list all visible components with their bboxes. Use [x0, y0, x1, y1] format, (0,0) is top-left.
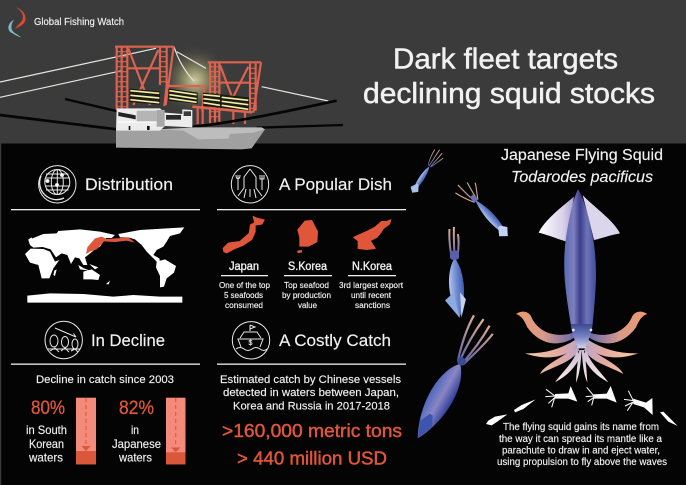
text block: flying squid explanation: parachute to draw in and eject water,	[502, 446, 660, 456]
icon: squid with cutlery	[231, 166, 269, 203]
stat: 82% in Japanese waters: Japanese	[112, 437, 161, 451]
text block: N.Korea: until recent	[351, 291, 392, 300]
text block: S.Korea: by production	[282, 291, 331, 300]
header band	[0, 0, 686, 144]
stat: 82% in Japanese waters: waters	[118, 450, 152, 464]
stat: 80% in South Korean waters: 80%	[31, 398, 65, 419]
icon: ship with dollar: $	[249, 340, 253, 347]
illustration: squid fishing vessel	[0, 44, 343, 149]
text block: N.Korea	[339, 261, 404, 310]
text block: flying squid explanation: the way it can spread its mantle like a	[499, 434, 662, 445]
text block: flying squid explanation: The flying squid gains its name from	[503, 422, 659, 433]
stat: 80% in South Korean waters: in South	[26, 423, 67, 437]
icon: declining squid	[45, 321, 82, 359]
text: decline since 2003: Decline in catch since 2003	[36, 374, 174, 386]
text block: Japan	[219, 261, 271, 310]
heading: Japanese Flying Squid: Japanese Flying Squid	[501, 147, 663, 164]
stat: 82% in Japanese waters	[112, 398, 161, 464]
map: South Korea	[298, 221, 317, 252]
small squid 3	[441, 227, 467, 318]
squid lights	[130, 89, 249, 111]
hull and cabin	[116, 108, 265, 149]
illustration: flying squid sequence	[486, 386, 678, 426]
poles over frames	[0, 99, 343, 129]
stat: million USD: > 440 million USD	[237, 448, 387, 468]
stat: 82% in Japanese waters: 82%	[119, 398, 154, 419]
vessel frames	[115, 47, 261, 124]
text block: Japan: 5 seafoods	[224, 291, 263, 300]
text block: Japan: One of the top	[219, 281, 271, 290]
text block: Japan: consumed	[225, 301, 263, 310]
text block: N.Korea: N.Korea	[352, 261, 393, 273]
heading: Japanese Flying Squid: Todarodes pacificus	[511, 169, 653, 186]
stat: 82% in Japanese waters: in	[131, 423, 139, 437]
small squid 2	[453, 175, 516, 243]
text block: estimated catch: detected in waters between Japan,	[223, 387, 399, 399]
text block: N.Korea: 3rd largest export	[339, 281, 404, 290]
title: declining squid stocks	[363, 78, 655, 110]
map: North Korea	[354, 220, 391, 249]
text block: S.Korea: value	[298, 301, 318, 310]
stat: metric tons: >160,000 metric tons	[222, 421, 402, 441]
stat: 80% in South Korean waters: waters	[28, 450, 63, 464]
text block: S.Korea: S.Korea	[288, 261, 328, 273]
text block: Japan: Japan	[229, 261, 259, 273]
heading: Distribution: Distribution	[85, 175, 173, 194]
small squid 4	[407, 314, 497, 445]
logo: Global Fishing Watch	[8, 8, 124, 38]
heading: Japanese Flying Squid	[501, 147, 663, 186]
text block: N.Korea: sanctions	[355, 301, 390, 310]
fins and mantle	[539, 189, 620, 324]
icon: ship with dollar	[232, 322, 270, 359]
text block: flying squid explanation: using propulsion to fly above the waves	[497, 457, 667, 468]
bar: 80% decline	[76, 398, 96, 464]
map: Japan	[223, 217, 264, 253]
wires and poles	[0, 47, 328, 101]
stat: 80% in South Korean waters	[26, 398, 67, 464]
text block: estimated catch: Estimated catch by Chinese vessels	[220, 374, 402, 386]
world map with squid range	[25, 227, 184, 303]
panel: country maps	[223, 217, 391, 253]
title	[363, 44, 655, 110]
text block: estimated catch	[220, 374, 402, 413]
text block: flying squid explanation	[497, 422, 667, 468]
logo: Global Fishing Watch: Global Fishing Watch	[34, 17, 124, 28]
title: Dark fleet targets	[393, 44, 618, 76]
heading: A Costly Catch: A Costly Catch	[279, 331, 391, 350]
heading: A Popular Dish: A Popular Dish	[279, 175, 392, 194]
text block: S.Korea: Top seafood	[284, 281, 329, 290]
heading: In Decline: In Decline	[91, 331, 165, 350]
stat: 80% in South Korean waters: Korean	[29, 437, 64, 451]
bar: 82% decline	[166, 398, 186, 464]
text block: S.Korea	[282, 261, 332, 310]
small squid 1	[408, 148, 446, 197]
icon: globe with pins	[39, 166, 76, 203]
text block: estimated catch: Korea and Russia in 2017-2018	[233, 401, 390, 413]
arms	[516, 312, 647, 383]
illustration: main squid	[516, 189, 647, 383]
